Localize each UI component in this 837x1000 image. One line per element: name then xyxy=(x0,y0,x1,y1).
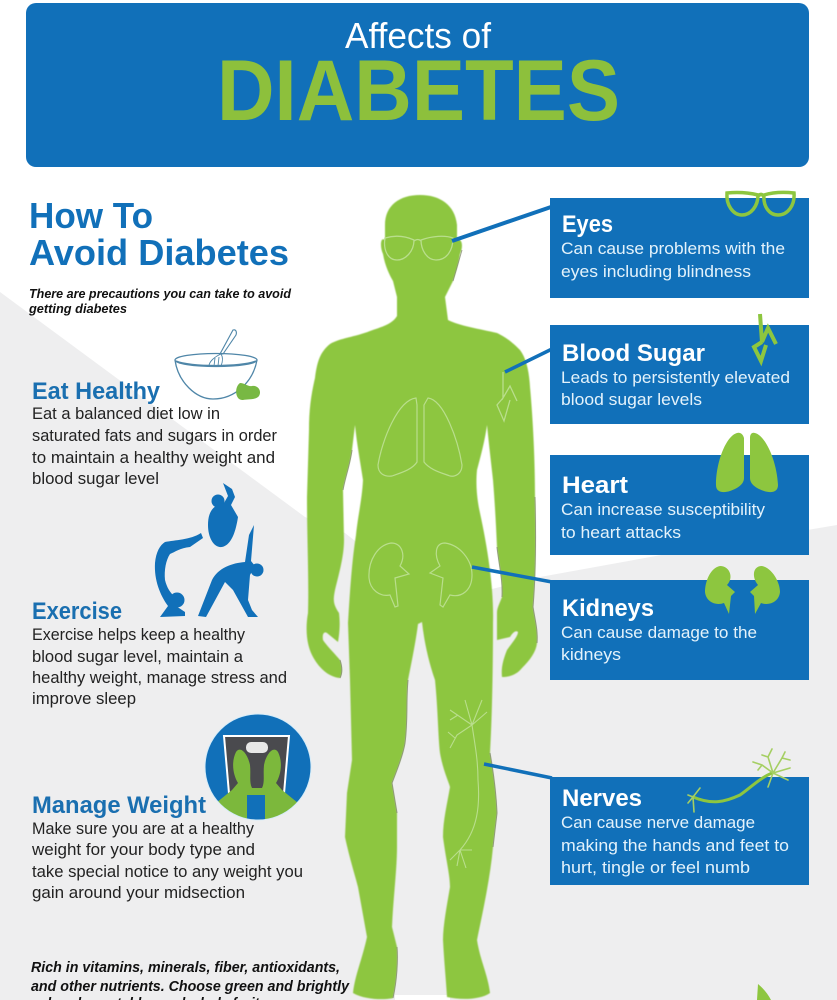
block: Manage Weight: weight for your body type and xyxy=(31,840,255,859)
block: Manage Weight: Make sure you are at a healthy xyxy=(32,819,254,838)
panel: eyes xyxy=(550,192,809,298)
body silhouette xyxy=(307,195,537,999)
block: Manage Weight: Manage Weight xyxy=(32,792,206,819)
connector: nerves xyxy=(484,764,552,778)
panel: blood sugar: Leads to persistently elevated xyxy=(561,368,790,387)
block: Manage Weight: take special notice to any weight you xyxy=(32,862,303,881)
text: rich in vitamins xyxy=(31,960,350,1000)
panel: nerves xyxy=(550,749,809,885)
block: Exercise xyxy=(32,598,287,708)
panel: blood sugar: Blood Sugar xyxy=(562,340,705,367)
block: Manage Weight xyxy=(31,792,303,902)
outline: nerve xyxy=(448,700,487,868)
outline: blood sugar bolt xyxy=(497,372,517,421)
human body figure xyxy=(307,195,537,999)
outline: glasses on face xyxy=(385,236,453,260)
icon: kidneys xyxy=(705,566,780,614)
block: Exercise: Exercise helps keep a healthy xyxy=(32,625,245,644)
block: Eat Healthy: Eat Healthy xyxy=(32,378,161,405)
block: Exercise: healthy weight, manage stress and xyxy=(32,668,287,687)
intro text: There are precautions you can take to avoid xyxy=(29,286,292,301)
icon: lungs xyxy=(716,433,778,492)
panel: blood sugar xyxy=(550,314,809,424)
icon: glasses xyxy=(727,192,794,215)
panel: blood sugar: blood sugar levels xyxy=(561,390,702,409)
icon: nerve cell xyxy=(688,749,790,812)
title: DIABETES: DIABETES xyxy=(217,43,620,139)
icon: bowl and whisk xyxy=(175,330,260,400)
panel: nerves: making the hands and feet to xyxy=(561,836,789,855)
panel: kidneys: Can cause damage to the xyxy=(561,623,757,642)
outline: lungs xyxy=(378,398,462,476)
intro text: getting diabetes xyxy=(28,301,127,316)
block: Eat Healthy: saturated fats and sugars in order xyxy=(32,426,277,445)
panel: nerves: hurt, tingle or feel numb xyxy=(561,858,750,877)
panel: heart xyxy=(550,433,809,555)
panel: kidneys: Kidneys xyxy=(562,595,654,622)
text: rich in vitamins: and other nutrients. Choose green and brightly xyxy=(31,979,350,995)
panel: heart: Can increase susceptibility xyxy=(561,500,766,519)
block: Manage Weight: gain around your midsection xyxy=(32,883,245,902)
intro text xyxy=(28,286,292,316)
panel: nerves: Nerves xyxy=(562,785,642,812)
block: Exercise: improve sleep xyxy=(32,689,136,708)
panel: heart: Heart xyxy=(562,472,628,499)
icon: leaf xyxy=(757,984,771,1000)
heading: How To Avoid Diabetes: How To xyxy=(29,195,153,236)
connector: kidneys xyxy=(472,567,552,582)
block: Eat Healthy: Eat a balanced diet low in xyxy=(32,404,220,423)
panel: kidneys: kidneys xyxy=(561,645,621,664)
panel: eyes: Can cause problems with the xyxy=(561,239,785,258)
block: Eat Healthy xyxy=(32,378,277,488)
title: Affects of: Affects of xyxy=(345,15,492,56)
body edge shading xyxy=(340,250,537,998)
icon: blood sugar bolt xyxy=(754,314,776,361)
heading: How To Avoid Diabetes xyxy=(29,195,289,273)
panel: eyes: eyes including blindness xyxy=(561,262,751,281)
icon: exercise figures xyxy=(155,483,264,617)
block: Eat Healthy: to maintain a healthy weight and xyxy=(32,448,275,467)
block: Exercise: blood sugar level, maintain a xyxy=(32,647,244,666)
panel: heart: to heart attacks xyxy=(561,523,681,542)
heading: How To Avoid Diabetes: Avoid Diabetes xyxy=(29,232,289,273)
text: rich in vitamins: Rich in vitamins, minerals, fiber, antioxidants, xyxy=(31,960,340,976)
outline: kidneys xyxy=(369,543,472,607)
block: Exercise: Exercise xyxy=(32,598,122,625)
icon: feet on scale xyxy=(205,714,311,825)
connector: blood sugar xyxy=(505,349,552,372)
connector: eyes xyxy=(452,207,551,241)
block: Eat Healthy: blood sugar level xyxy=(32,469,159,488)
panel: kidneys xyxy=(550,566,809,680)
header banner xyxy=(26,3,809,167)
panel: nerves: Can cause nerve damage xyxy=(561,813,755,832)
panel: eyes: Eyes xyxy=(562,211,613,238)
